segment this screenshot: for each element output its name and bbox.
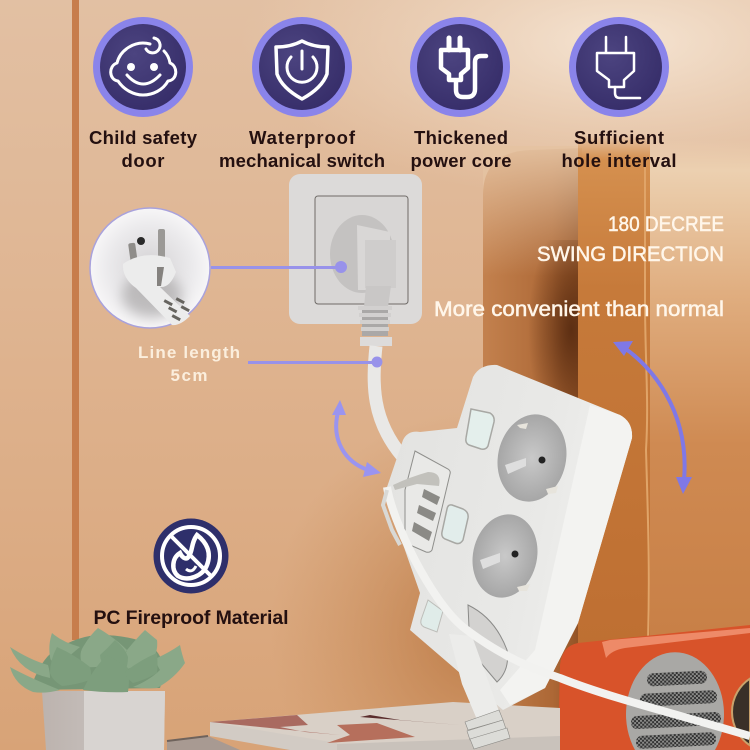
bottom switch: [421, 600, 443, 632]
callout line: plug detail: [211, 261, 347, 273]
fireproof material badge: [154, 518, 228, 594]
swing direction text: [434, 213, 724, 321]
power cord from wall socket to strip: [374, 346, 402, 456]
callout: line length: [138, 343, 382, 385]
feature captions: Sufficient: [574, 127, 664, 148]
fireproof caption: PC Fireproof Material: [94, 607, 288, 629]
feature captions: door: [122, 150, 164, 171]
USB panel: [393, 451, 450, 552]
sofa behind power strip: [483, 135, 750, 750]
top socket: [490, 408, 574, 508]
wall socket with plugged adapter: [289, 174, 422, 346]
power strip body: [385, 365, 632, 722]
left swing arrow: [332, 400, 381, 477]
swing direction text: 180 DECREE: [608, 213, 724, 236]
feature icon: thickened power core: [410, 17, 510, 117]
right swing arrow: [613, 341, 692, 494]
feature icon: waterproof mechanical switch: [252, 17, 352, 117]
radio on table: [558, 625, 750, 750]
feature captions: power core: [410, 150, 512, 171]
front cord and strain relief: [383, 487, 750, 749]
bottom socket with plug: [449, 605, 508, 722]
feature icon: sufficient hole interval: [569, 17, 669, 117]
swing direction text: SWING DIRECTION: [537, 243, 724, 266]
feature icon: child safety door: [93, 17, 193, 117]
feature captions: Child safety: [89, 127, 198, 148]
books on table: [167, 702, 560, 750]
callout: line length: 5cm: [170, 366, 208, 385]
potted succulent: [10, 628, 185, 750]
swing direction text: More convenient than normal: [434, 298, 724, 321]
feature captions: Thickened: [414, 127, 508, 148]
zoomed plug detail circle: [90, 208, 210, 328]
callout: line length: Line length: [138, 343, 240, 362]
feature captions: Waterproof: [249, 127, 356, 148]
top switch: [466, 409, 494, 449]
middle switch: [442, 505, 468, 544]
feature captions: mechanical switch: [219, 150, 385, 171]
feature captions: hole interval: [562, 150, 676, 171]
middle socket: [465, 508, 545, 604]
feature captions: [89, 127, 676, 171]
